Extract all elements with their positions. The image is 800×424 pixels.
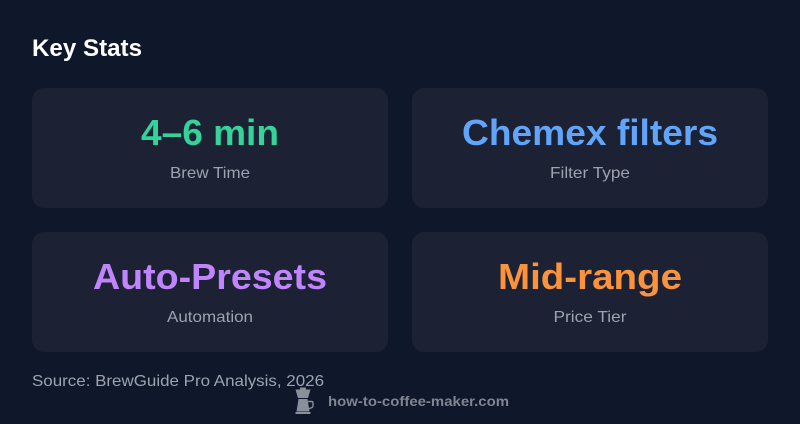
stat value: 4–6 min: 4–6 min — [141, 112, 279, 153]
stat label: automation: Automation — [167, 309, 253, 326]
panel: brew time — [32, 88, 388, 208]
stat label: price tier: Price Tier — [554, 309, 627, 326]
stat value: Chemex filters: Chemex filters — [462, 112, 718, 153]
panel: filter type — [412, 88, 768, 208]
title: Key Stats — [32, 35, 142, 62]
stat value: Auto-Presets: Auto-Presets — [93, 256, 327, 297]
watermark: site name: how-to-coffee-maker.com — [328, 393, 509, 409]
panel: price tier — [412, 232, 768, 352]
stat value: Mid-range: Mid-range — [498, 256, 682, 297]
icon: coffee maker — [296, 388, 313, 414]
source note: Source: BrewGuide Pro Analysis, 2026 — [32, 373, 324, 390]
stat label: filter type: Filter Type — [550, 165, 630, 182]
panel: automation — [32, 232, 388, 352]
stat label: brew time: Brew Time — [170, 165, 250, 182]
